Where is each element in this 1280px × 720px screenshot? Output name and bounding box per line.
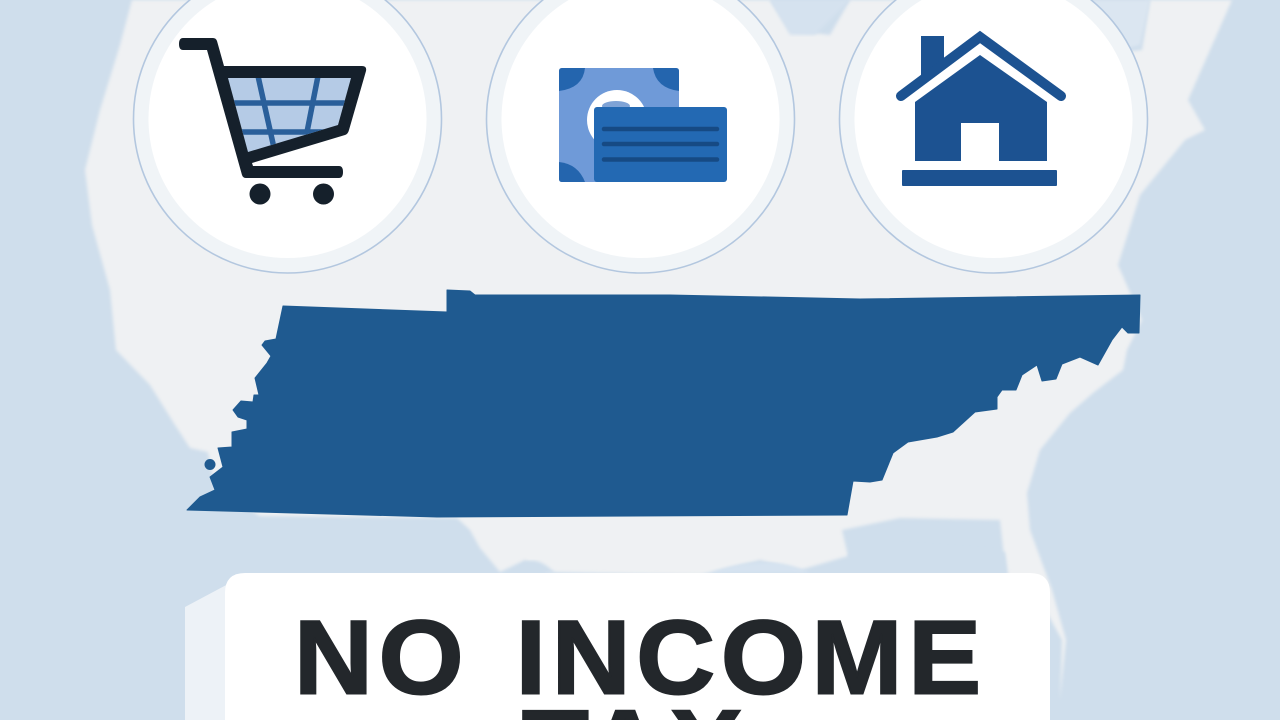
icon: payment card <box>594 107 727 182</box>
title card <box>225 573 1050 720</box>
icon: house <box>901 36 1061 186</box>
badge: money and card <box>486 0 794 273</box>
icon: banknote <box>559 68 679 182</box>
gulf bays <box>515 560 555 573</box>
state silhouette: Tennessee <box>187 290 1140 517</box>
badge: house <box>840 0 1148 273</box>
badge: shopping cart <box>134 0 442 273</box>
title: No Income Tax: NO INCOME <box>294 598 987 716</box>
great lakes <box>770 0 850 35</box>
icon: shopping cart <box>179 38 366 204</box>
panel shadow behind title card <box>185 583 240 720</box>
